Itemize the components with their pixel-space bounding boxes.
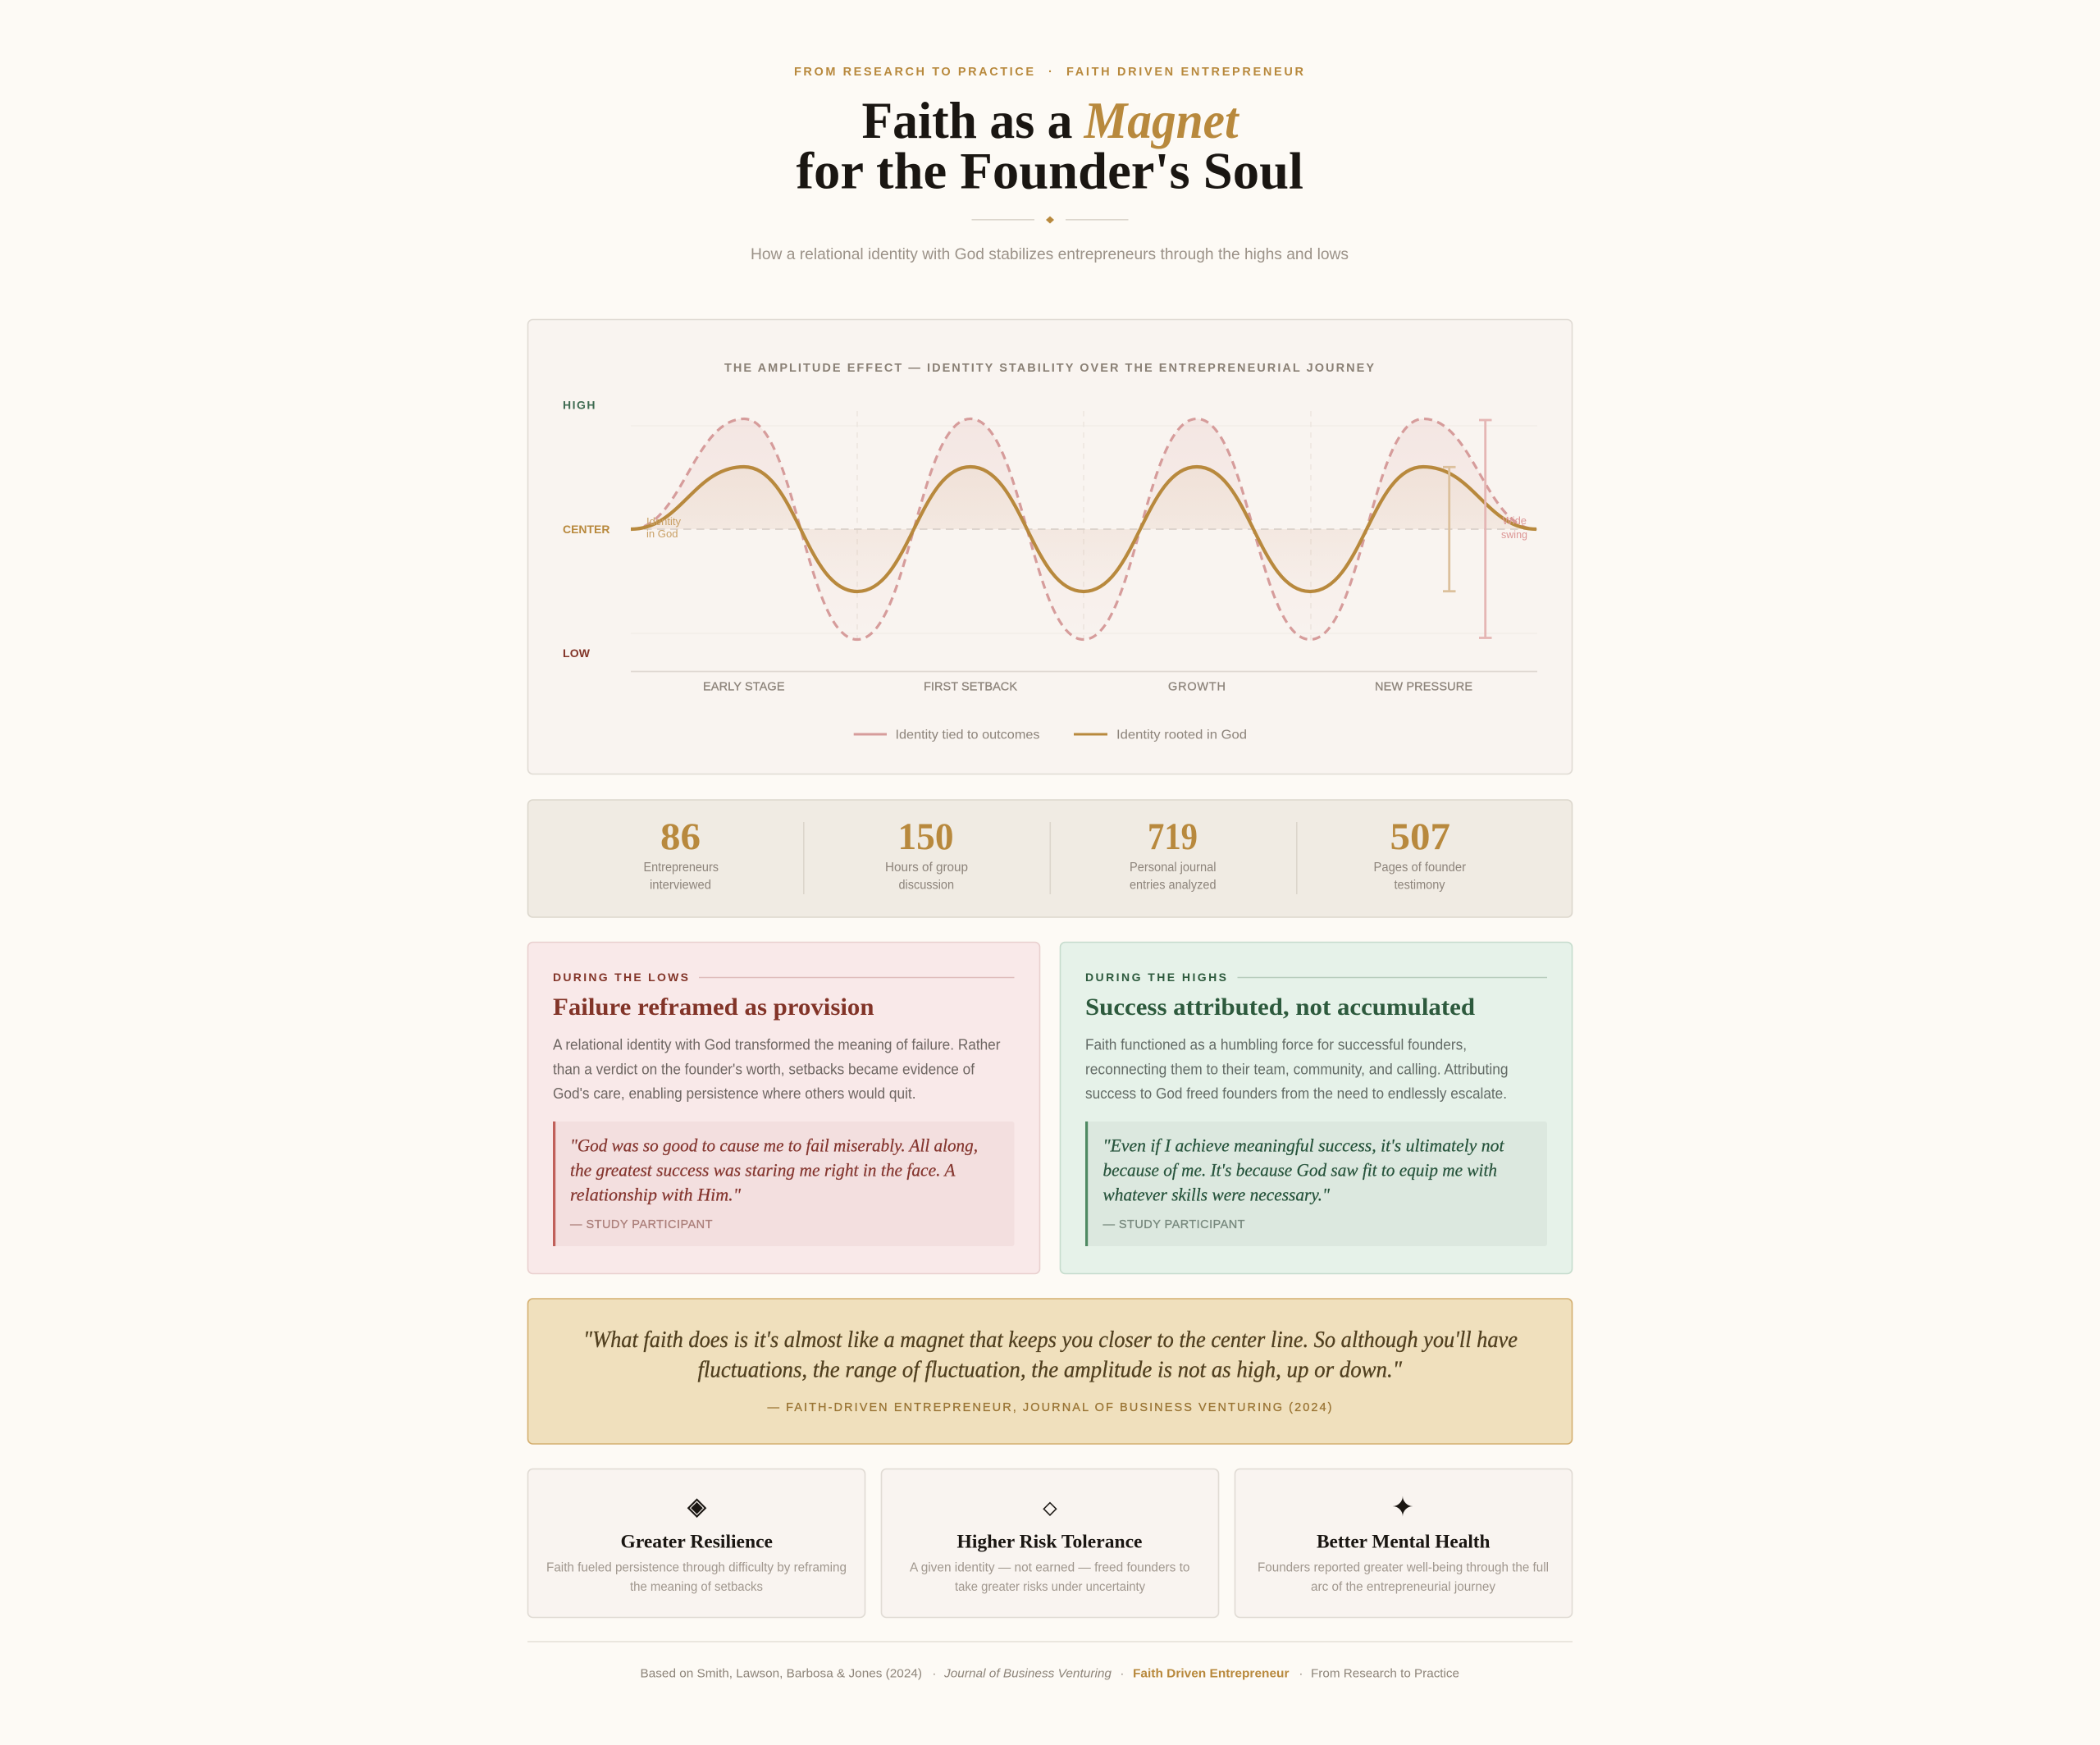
y axis labels: HIGH <box>563 399 596 412</box>
eyebrow: FAITH DRIVEN ENTREPRENEUR <box>1066 66 1304 79</box>
highs body text <box>1085 1035 1508 1102</box>
stat: 719 journal entries <box>1130 815 1216 893</box>
stat: 86 entrepreneurs <box>643 815 719 893</box>
lows quote box: relationship with Him." <box>570 1185 742 1204</box>
highs quote box: whatever skills were necessary." <box>1102 1185 1331 1204</box>
footer citation <box>640 1667 1459 1680</box>
rooted identity area fill <box>631 467 1536 592</box>
range bar: rooted <box>1443 467 1455 592</box>
pull quote text: fluctuations, the range of fluctuation, the amplitude is not as high, up or down." <box>697 1357 1402 1383</box>
lows quote box <box>553 1121 1014 1246</box>
stat: 507 pages: testimony <box>1395 878 1445 893</box>
highs quote box <box>1085 1121 1547 1246</box>
footer citation: From Research to Practice <box>1311 1667 1459 1680</box>
footer <box>527 1642 1573 1680</box>
lows body text: than a verdict on the founder's worth, setbacks became evidence of <box>553 1060 975 1078</box>
mental health heading: Better Mental Health <box>1317 1531 1491 1552</box>
stat: 719 journal entries: 719 <box>1148 815 1198 858</box>
highs heading: Success attributed, not accumulated <box>1085 994 1475 1021</box>
mental health description: Founders reported greater well-being through the full <box>1258 1560 1549 1575</box>
eyebrow: · <box>1048 66 1052 79</box>
stat: 86 entrepreneurs: Entrepreneurs <box>643 861 719 875</box>
stat: 86 entrepreneurs: 86 <box>660 815 701 858</box>
panel: research stats <box>528 800 1572 917</box>
footer citation: Journal of Business Venturing <box>943 1667 1112 1680</box>
footer citation: · <box>1121 1667 1124 1680</box>
stat: 86 entrepreneurs: interviewed <box>650 878 711 893</box>
footer citation: · <box>932 1667 936 1680</box>
highs body text: Faith functioned as a humbling force for successful founders, <box>1085 1035 1467 1053</box>
stat: 507 pages: 507 <box>1390 815 1450 858</box>
stat: 507 pages <box>1373 815 1466 893</box>
stage labels: NEW PRESSURE <box>1375 681 1472 694</box>
title: Magnet <box>1084 91 1240 149</box>
header <box>751 66 1349 263</box>
stat: 719 journal entries: entries analyzed <box>1130 878 1216 893</box>
lows quote box: "God was so good to cause me to fail miserably. All along, <box>570 1135 978 1155</box>
curve: identity rooted in God <box>631 467 1536 592</box>
annotation: identity in God: Identity <box>646 516 682 528</box>
stage labels: GROWTH <box>1168 681 1226 694</box>
stage labels: EARLY STAGE <box>703 681 785 694</box>
grid lines <box>631 411 1537 642</box>
curve: identity tied to outcomes <box>631 418 1536 640</box>
stat dividers <box>803 822 1298 894</box>
pull quote text <box>583 1327 1518 1383</box>
lows body text: God's care, enabling persistence where others would quit. <box>553 1085 915 1102</box>
legend: Identity tied to outcomes <box>896 729 1040 742</box>
resilience heading: Greater Resilience <box>620 1531 773 1552</box>
panel: during the highs <box>1060 942 1572 1273</box>
highs quote box: "Even if I achieve meaningful success, it's ultimately not <box>1102 1135 1504 1155</box>
stat: 150 hours <box>885 815 968 893</box>
eyebrow: FROM RESEARCH TO PRACTICE <box>794 66 1034 79</box>
stage labels <box>703 681 1472 694</box>
panel: magnet pull quote <box>528 1299 1572 1444</box>
stat: 150 hours: discussion <box>899 878 954 893</box>
mental health description: arc of the entrepreneurial journey <box>1311 1580 1495 1594</box>
icon: four point star: ✦ <box>1391 1491 1414 1523</box>
footer citation: Based on Smith, Lawson, Barbosa & Jones (2024) <box>640 1667 922 1680</box>
highs body text: reconnecting them to their team, community, and calling. Attributing <box>1085 1060 1508 1078</box>
pull quote attribution: — FAITH-DRIVEN ENTREPRENEUR, JOURNAL OF BUSINESS VENTURING (2024) <box>768 1401 1332 1414</box>
chart title: THE AMPLITUDE EFFECT — IDENTITY STABILITY OVER THE ENTREPRENEURIAL JOURNEY <box>724 362 1374 375</box>
center line <box>631 528 1537 530</box>
resilience description: Faith fueled persistence through difficulty by reframing <box>546 1560 847 1575</box>
risk description <box>910 1560 1189 1594</box>
risk heading: Higher Risk Tolerance <box>956 1531 1142 1552</box>
icon: layered diamond: ◈ <box>687 1492 706 1521</box>
title <box>796 91 1303 200</box>
stat: 507 pages: Pages of founder <box>1373 861 1466 875</box>
legend <box>854 729 1247 742</box>
divider with diamond <box>971 217 1129 223</box>
annotation: wide swing: Wide <box>1503 515 1527 527</box>
stat: 150 hours: Hours of group <box>885 861 968 875</box>
panel: during the lows <box>528 942 1040 1273</box>
card: greater resilience <box>528 1469 865 1618</box>
pull quote text: "What faith does is it's almost like a magnet that keeps you closer to the center line. So although you'll have <box>583 1327 1518 1353</box>
highs eyebrow: DURING THE HIGHS <box>1085 971 1226 984</box>
annotation: wide swing: swing <box>1501 529 1527 541</box>
lows quote box: — STUDY PARTICIPANT <box>570 1218 713 1231</box>
footer citation: · <box>1299 1667 1303 1680</box>
stat: 719 journal entries: Personal journal <box>1130 861 1216 875</box>
annotation: identity in God: in God <box>646 528 678 540</box>
y axis labels <box>563 399 610 660</box>
card: better mental health <box>1235 1469 1572 1618</box>
lows quote box: the greatest success was staring me right in the face. A <box>570 1160 956 1180</box>
lows heading: Failure reframed as provision <box>553 994 874 1021</box>
card: higher risk tolerance <box>881 1469 1219 1618</box>
resilience description: the meaning of setbacks <box>630 1580 763 1594</box>
stat: 150 hours: 150 <box>897 815 953 858</box>
y axis labels: CENTER <box>563 523 610 536</box>
highs quote box: — STUDY PARTICIPANT <box>1102 1218 1245 1231</box>
highs quote box: because of me. It's because God saw fit to equip me with <box>1102 1160 1497 1180</box>
stage labels: FIRST SETBACK <box>924 681 1017 694</box>
lows eyebrow: DURING THE LOWS <box>553 971 688 984</box>
annotation: identity in God <box>646 516 682 540</box>
panel: amplitude chart <box>528 320 1572 774</box>
mental health description <box>1258 1560 1549 1594</box>
lows body text: A relational identity with God transformed the meaning of failure. Rather <box>553 1035 1001 1053</box>
title: for the Founder's Soul <box>796 141 1303 200</box>
range bar: outcomes <box>1479 420 1491 638</box>
resilience description <box>546 1560 847 1594</box>
legend: Identity rooted in God <box>1116 729 1247 742</box>
icon: open diamond: ◇ <box>1043 1498 1057 1519</box>
lows body text <box>553 1035 1001 1102</box>
highs body text: success to God freed founders from the need to endlessly escalate. <box>1085 1085 1507 1102</box>
eyebrow <box>794 66 1304 79</box>
outcome identity area fill <box>631 418 1536 640</box>
risk description: take greater risks under uncertainty <box>955 1580 1145 1594</box>
footer citation: Faith Driven Entrepreneur <box>1133 1667 1290 1680</box>
x axis <box>631 671 1537 673</box>
title: Faith as a <box>861 91 1073 149</box>
y axis labels: LOW <box>563 646 591 660</box>
subtitle: How a relational identity with God stabilizes entrepreneurs through the highs and lows <box>751 245 1349 263</box>
risk description: A given identity — not earned — freed founders to <box>910 1560 1189 1575</box>
annotation: wide swing <box>1501 515 1527 541</box>
